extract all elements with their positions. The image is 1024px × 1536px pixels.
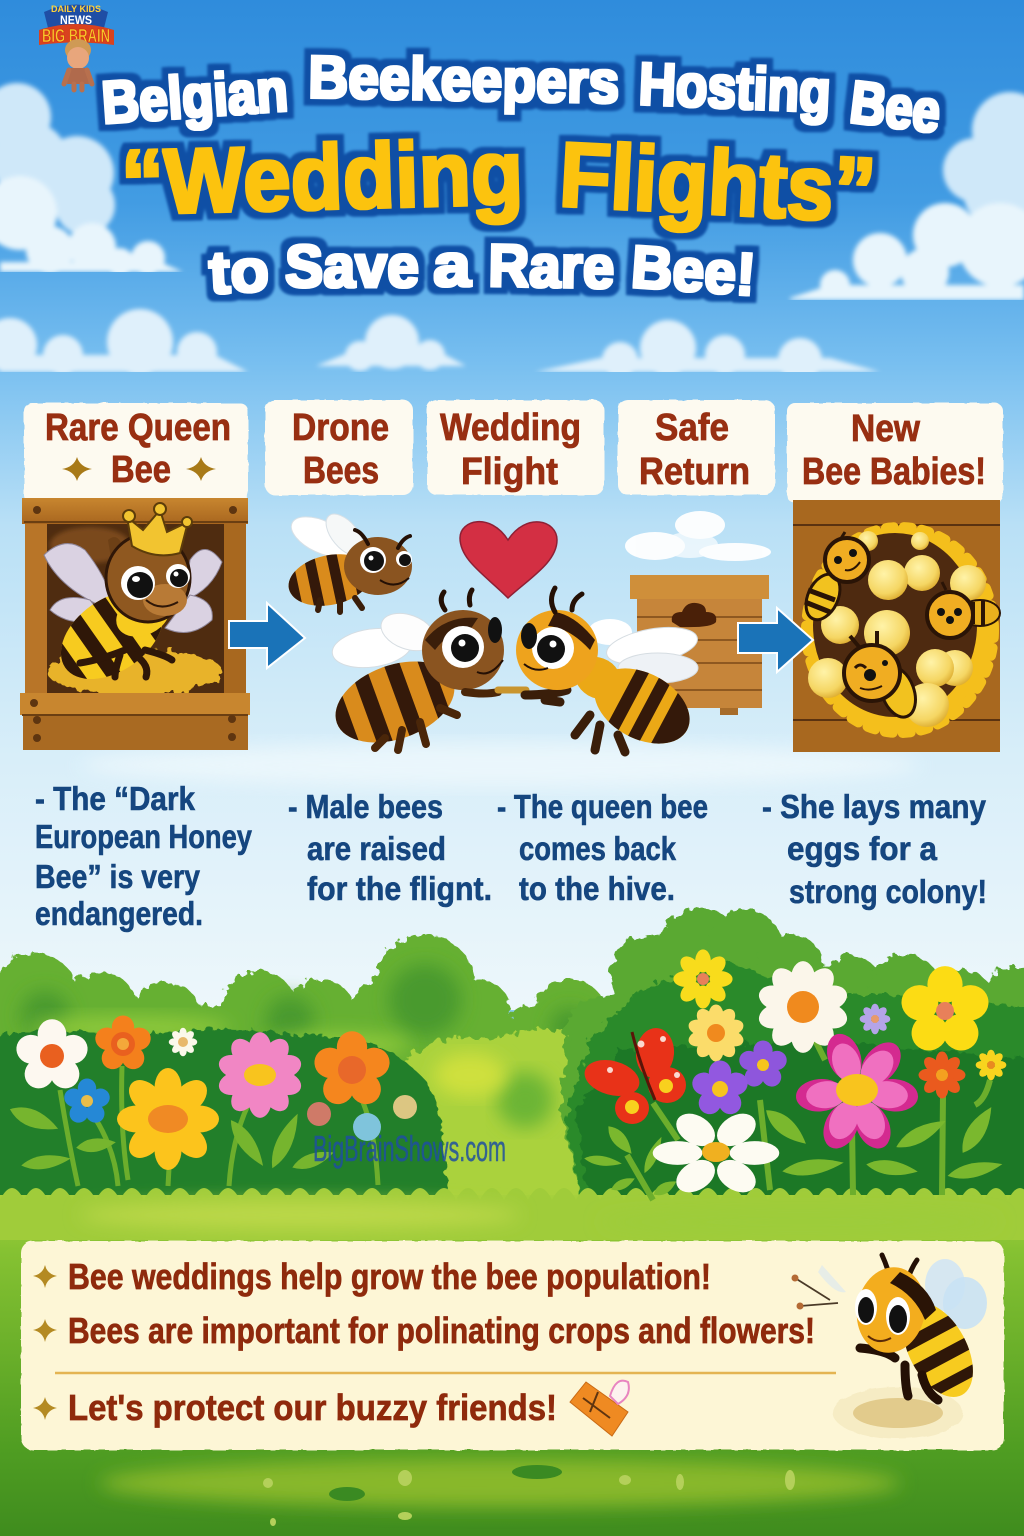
lawn highlights bbox=[80, 1201, 1000, 1507]
clouds bbox=[0, 83, 1024, 787]
watermark: BigBrainShows.com bbox=[313, 1128, 506, 1169]
foreground hedge left bbox=[0, 1029, 446, 1215]
light shrubs bbox=[405, 1030, 600, 1220]
description: babies: eggs for a bbox=[787, 830, 938, 867]
title line 2: Flights” bbox=[557, 124, 878, 242]
flower: white large bbox=[756, 961, 850, 1053]
icon: queen bee in flight bbox=[516, 588, 705, 761]
flowers: small background bbox=[307, 1095, 417, 1141]
icon: queen bee bbox=[42, 503, 222, 700]
logo: DAILY KIDS bbox=[51, 4, 101, 14]
icon: cheering bee bbox=[792, 1255, 989, 1439]
description: rare queen: - The “Dark bbox=[35, 780, 196, 817]
description: babies bbox=[762, 788, 987, 910]
description: return: - The queen bee bbox=[497, 788, 708, 825]
clouds: under bees bbox=[80, 743, 920, 787]
description: return: to the hive. bbox=[519, 870, 675, 907]
description: rare queen: European Honey bbox=[35, 818, 253, 855]
flower: yellow bbox=[117, 1068, 219, 1170]
flower: blue bbox=[62, 1079, 112, 1126]
light highlights bbox=[30, 1016, 410, 1057]
label: new bee babies: Bee Babies! bbox=[802, 451, 986, 493]
description: return: comes back bbox=[519, 830, 677, 867]
title line 1: Hosting bbox=[638, 50, 832, 125]
label: safe return: Return bbox=[639, 451, 750, 493]
flowers left bbox=[7, 1015, 417, 1186]
label: safe return: Safe bbox=[655, 407, 729, 449]
flower: magenta bbox=[795, 1029, 919, 1154]
logo bbox=[39, 4, 114, 90]
icon: drone bee in flight bbox=[322, 590, 526, 760]
description: rare queen: endangered. bbox=[35, 895, 203, 932]
flower: purple two bbox=[689, 1060, 751, 1119]
icon: orange butterfly bbox=[570, 1381, 629, 1436]
description: return bbox=[497, 788, 708, 907]
far tree line bbox=[0, 935, 1024, 1220]
arrow: return to babies bbox=[738, 608, 813, 672]
cloud: top left bbox=[0, 83, 183, 276]
logo: BIG BRAIN bbox=[42, 26, 110, 46]
label: drone bees: Drone bbox=[292, 407, 389, 449]
lawn tufts bbox=[263, 1470, 795, 1526]
label: new bee babies: New bbox=[851, 408, 920, 450]
description: babies: strong colony! bbox=[789, 873, 987, 910]
flower: small yellow bbox=[976, 1050, 1006, 1080]
label: rare queen bee: Rare Queen bbox=[45, 407, 231, 449]
tall bush right bbox=[560, 908, 1024, 1215]
label: wedding flight bbox=[427, 400, 604, 495]
step labels bbox=[24, 400, 1003, 503]
description: rare queen: Bee” is very bbox=[35, 858, 201, 895]
text: protect: Let's protect our buzzy friends! bbox=[68, 1387, 557, 1428]
label: drone bees: Bees bbox=[303, 450, 379, 492]
icon: butterfly bbox=[581, 1026, 686, 1124]
clouds: middle row bbox=[0, 309, 880, 382]
title line 3: Bee! bbox=[629, 233, 758, 308]
title line 3: Rare bbox=[488, 232, 615, 301]
flower: purple one bbox=[737, 1041, 789, 1090]
panel: key takeaways bbox=[21, 1241, 1004, 1450]
icon: baby bee three bbox=[844, 631, 922, 722]
title line 1: Bee bbox=[847, 68, 944, 146]
label: rare queen bee: Bee bbox=[111, 449, 171, 491]
description: drones: - Male bees bbox=[288, 788, 443, 825]
label: new bee babies bbox=[787, 403, 1003, 503]
garden background bbox=[0, 908, 1024, 1220]
description: babies: - She lays many bbox=[762, 788, 987, 825]
title line 1: Belgian bbox=[100, 57, 290, 136]
title line 1 bbox=[100, 43, 944, 146]
icon: baby bee one bbox=[799, 532, 869, 625]
flower: yellow top bbox=[673, 949, 733, 1009]
flower: yellow right bbox=[897, 966, 993, 1058]
label: drone bees bbox=[265, 400, 413, 495]
label: rare queen bee bbox=[24, 403, 248, 503]
icon: hive cloud bbox=[625, 511, 771, 561]
flowers right bbox=[581, 949, 1006, 1200]
label: wedding flight: Flight bbox=[461, 451, 558, 493]
grass edge bbox=[0, 1188, 1024, 1240]
stems and leaves left bbox=[7, 1066, 378, 1186]
flower: white bbox=[13, 1019, 91, 1094]
label: safe return bbox=[618, 400, 775, 495]
flower: pink bbox=[216, 1032, 304, 1118]
text: bee weddings: Bee weddings help grow the bee population! bbox=[68, 1256, 711, 1297]
sky background bbox=[0, 0, 1024, 1010]
icon: boy mascot bbox=[64, 39, 92, 90]
arrow: queen to drones bbox=[229, 603, 305, 668]
icon: drone bee bbox=[282, 507, 412, 614]
icon: baby bee two bbox=[927, 582, 1000, 638]
flower: orange bbox=[92, 1015, 154, 1074]
icon: heart bbox=[460, 522, 557, 598]
flower: red bbox=[919, 1052, 965, 1098]
cloud: top right bbox=[790, 92, 1024, 300]
title bbox=[100, 43, 944, 308]
stems and leaves right bbox=[584, 1040, 1004, 1200]
label: wedding flight: Wedding bbox=[440, 407, 581, 449]
icon: crown bbox=[127, 510, 188, 555]
text: pollinating: Bees are important for polinating crops and flowers! bbox=[68, 1310, 815, 1351]
title line 2: “Wedding bbox=[120, 122, 524, 234]
icon: eggs bbox=[808, 531, 986, 727]
title line 1: Beekeepers bbox=[308, 43, 620, 116]
logo: NEWS bbox=[60, 13, 92, 27]
darker tree crowns bbox=[21, 964, 590, 1048]
description: rare queen bbox=[35, 780, 253, 932]
flower: orange large bbox=[310, 1031, 394, 1110]
title line 3: a bbox=[433, 232, 472, 299]
flower: white bottom bbox=[653, 1109, 779, 1197]
title line 3: to bbox=[207, 237, 271, 307]
bullet: diamonds bbox=[33, 1265, 57, 1420]
description: drones: for the flignt. bbox=[307, 870, 492, 907]
title line 2 bbox=[120, 122, 878, 242]
panel: queen crate bbox=[20, 498, 250, 750]
panel: bee babies crate bbox=[793, 500, 1000, 752]
lawn bbox=[0, 1188, 1024, 1536]
icon: hive bbox=[625, 511, 771, 715]
title line 3 bbox=[207, 232, 758, 308]
flower: pale purple bbox=[860, 1004, 890, 1034]
description: drones bbox=[288, 788, 492, 907]
icon: held hands bbox=[465, 692, 498, 694]
flower: gold bbox=[687, 1004, 745, 1062]
title line 3: Save bbox=[285, 233, 419, 300]
flower: small white bbox=[169, 1028, 197, 1056]
description: drones: are raised bbox=[307, 830, 446, 867]
